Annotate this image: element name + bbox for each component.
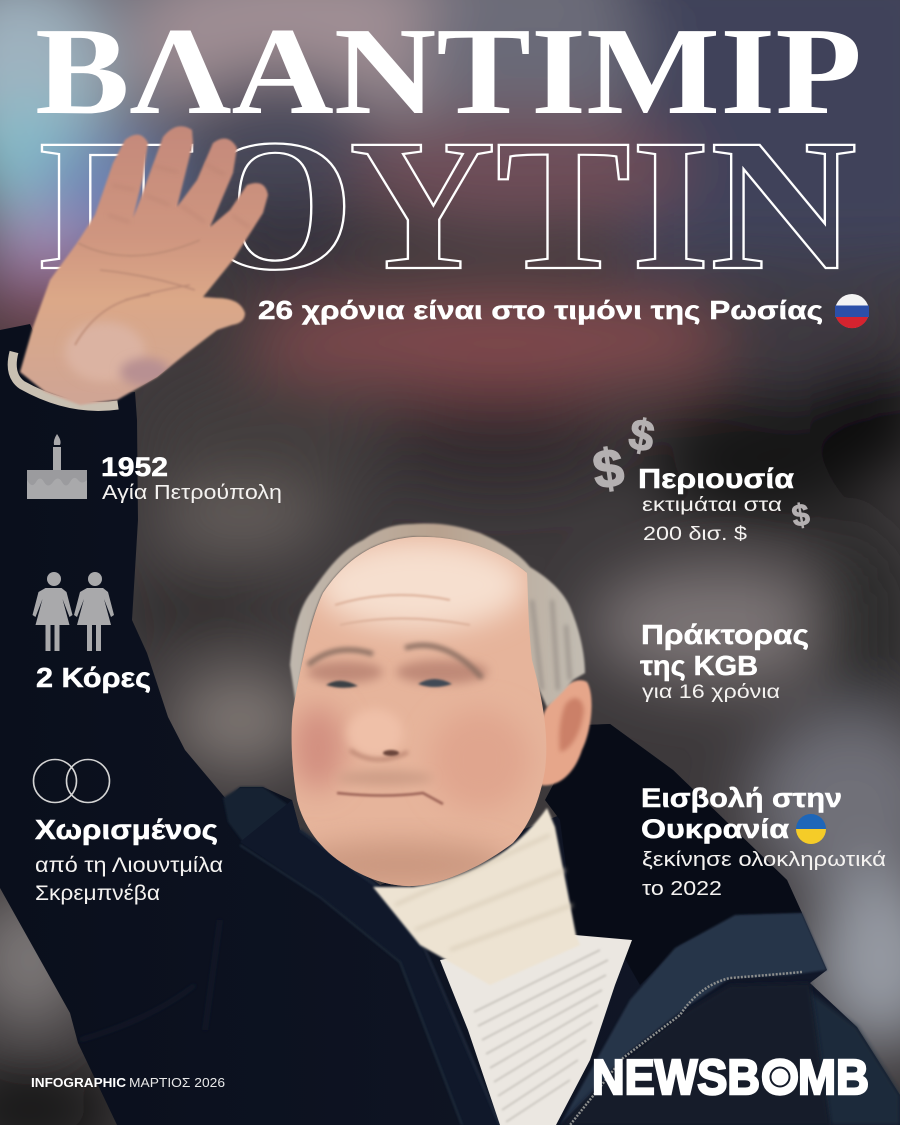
eye socket shadows: [307, 661, 383, 683]
logo: NEWSBOMB: MB: [798, 1051, 869, 1105]
cuff: [12, 352, 118, 406]
icons: dollar signs: $: [625, 410, 658, 462]
cheek shading: [292, 706, 344, 790]
footer credit: [31, 1075, 225, 1090]
fact: Ukraine invasion: ξεκίνησε ολοκληρωτικά: [642, 849, 886, 871]
fact: Ukraine invasion: Εισβολή στην: [641, 783, 842, 813]
person: white knit sweater: [440, 935, 632, 1125]
right shoulder panel: [812, 996, 900, 1125]
fact: Ukraine invasion: [641, 783, 886, 900]
person: face: [292, 536, 546, 886]
icon: Ukrainian flag: [796, 814, 826, 844]
forehead wrinkles: [335, 595, 470, 625]
logo: NEWSBOMB: O: [761, 1051, 799, 1105]
person: ear: [535, 680, 592, 785]
raised sleeve and torso: [0, 324, 900, 1125]
fact: birth: Αγία Πετρούπολη: [102, 482, 282, 504]
fact: KGB: για 16 χρόνια: [642, 682, 780, 703]
nose: [347, 709, 403, 757]
sleeve wrinkles: [80, 920, 220, 1040]
fact: wealth: Περιουσία: [638, 463, 794, 494]
fact: KGB: [640, 619, 809, 703]
fact: separated: από τη Λιουντμίλα: [35, 854, 223, 877]
person: hair: [290, 523, 585, 707]
icon: two separated rings: [34, 760, 110, 802]
logo: NEWSBOMB: [592, 1051, 869, 1105]
fact: wealth: εκτιμάται στα: [642, 495, 782, 516]
icons: dollar signs: [589, 410, 812, 534]
footer credit: ΜΑΡΤΙΟΣ 2026: [129, 1075, 225, 1090]
fact: KGB: της KGB: [640, 650, 758, 681]
upper right collar: [560, 913, 827, 1125]
jaw shading: [290, 841, 510, 889]
fact: daughters: [32, 572, 151, 693]
footer credit: INFOGRAPHIC: [31, 1075, 127, 1090]
icons: dollar signs: $: [589, 437, 627, 501]
left shoulder panel: [223, 787, 288, 842]
fact: Ukraine invasion: Ουκρανία: [641, 814, 789, 844]
fact: separated: Σκρεμπνέβα: [35, 882, 160, 905]
hood lining: [545, 724, 802, 985]
fact: birth: 1952: [101, 452, 168, 482]
fact: daughters: 2 Κόρες: [36, 662, 151, 693]
subtitle: 26 χρόνια είναι στο τιμόνι της Ρωσίας: [258, 295, 823, 325]
zipper: [570, 972, 802, 1125]
icons: dollar signs: $: [789, 496, 812, 534]
forehead highlight: [315, 540, 525, 630]
fact: birth: [27, 434, 282, 504]
fact: wealth: 200 δισ. $: [643, 524, 748, 545]
eyebrows: [308, 645, 482, 678]
fact: separated: [34, 760, 223, 905]
fact: Ukraine invasion: το 2022: [642, 878, 722, 900]
title: ΒΛΑΝΤΙΜΙΡ: ΒΛΑΝΤΙΜΙΡ: [35, 3, 862, 141]
icon: two women: [32, 572, 114, 651]
fact: wealth: [589, 410, 812, 545]
icon: birthday cake: [27, 434, 87, 499]
person: cream turtleneck: [373, 808, 580, 985]
eyes: [326, 681, 358, 688]
raised hand: [12, 126, 268, 406]
title outline: ΠΟΥΤΙΝ: ΠΟΥΤΙΝ: [38, 100, 857, 309]
fact: separated: Χωρισμένος: [35, 814, 218, 845]
person: jacket: [0, 324, 900, 1125]
left collar band: [240, 800, 414, 990]
icon: Russian flag: [835, 294, 869, 328]
moustache shade: [337, 770, 433, 786]
fact: KGB: Πράκτορας: [641, 619, 809, 650]
mouth: [337, 793, 443, 804]
logo: NEWSBOMB: NEWSB: [592, 1051, 760, 1105]
